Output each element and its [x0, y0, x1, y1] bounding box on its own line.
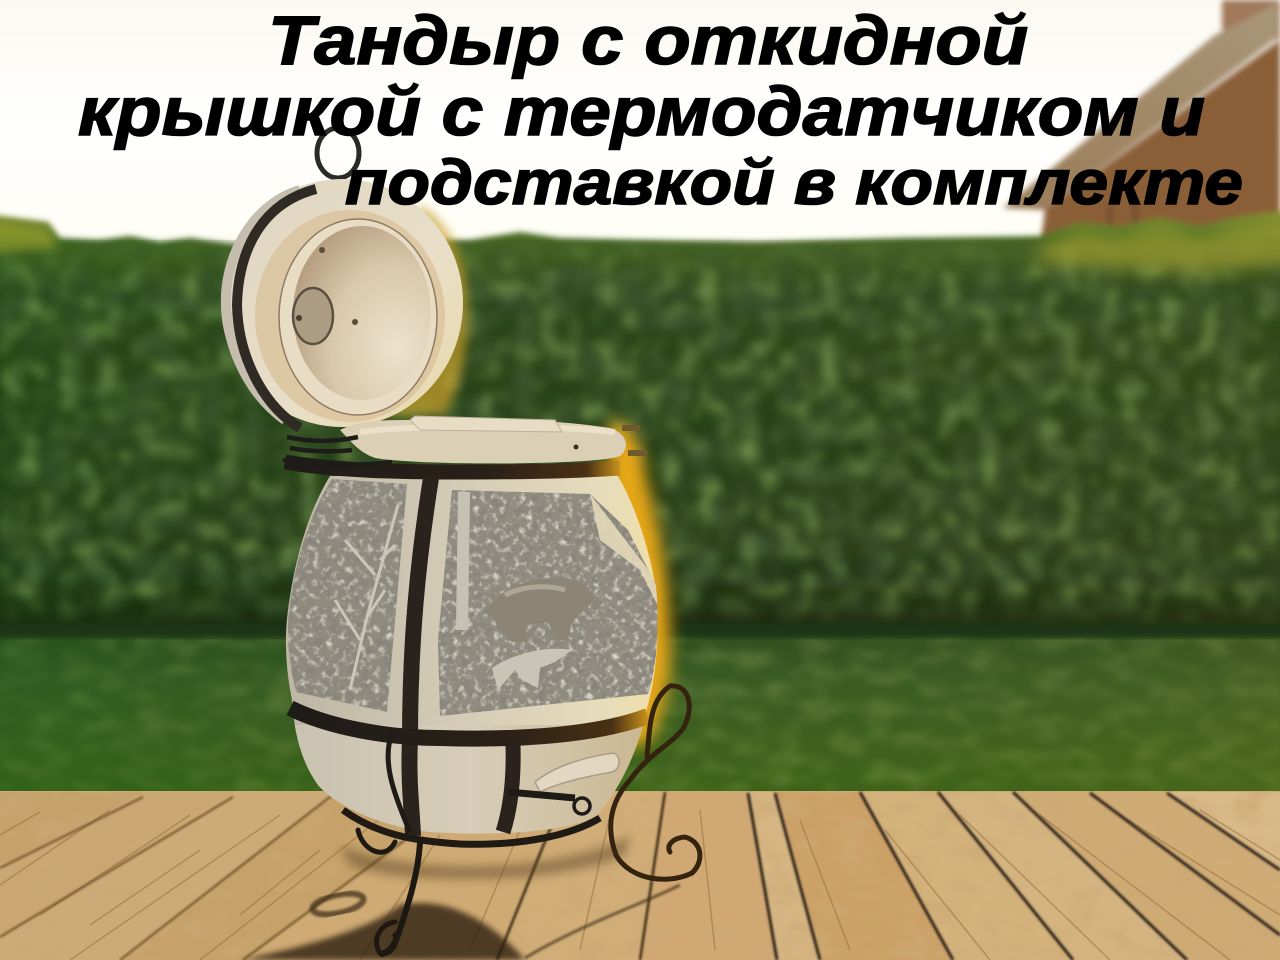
title: крышкой с термодатчиком и: [78, 73, 1205, 150]
background: house: [1003, 0, 1280, 250]
background: lawn: [0, 632, 1280, 792]
lower cream section: [294, 725, 642, 834]
tree trunk: [456, 492, 470, 630]
bear: [488, 577, 594, 642]
second vertical band: [503, 745, 513, 832]
lid ring handle: [317, 128, 359, 178]
top neck: [340, 416, 626, 463]
title: подставкой в комплекте: [345, 148, 1243, 218]
title: Тандыр с откидной: [268, 2, 1028, 79]
dog: [492, 649, 572, 690]
plank seams: [0, 792, 1280, 960]
wood grain streaks: [0, 810, 1280, 960]
lower horizontal band: [290, 708, 648, 739]
pot body: [284, 476, 661, 840]
sunlit hedge tops: [1040, 216, 1280, 272]
stand ring: [343, 810, 600, 844]
plank tones: [0, 792, 143, 868]
relief panel: left forest: [288, 479, 407, 712]
hedge foot shadow: [0, 624, 1280, 638]
curved strap: [388, 733, 410, 832]
main vertical band: [409, 478, 431, 836]
relief panel: right bear scene: [436, 488, 661, 718]
title: [78, 2, 1243, 218]
background: sky: [0, 0, 1280, 260]
hinge rods: [283, 437, 392, 465]
background: hedge: [0, 208, 1280, 640]
door latch: [508, 792, 590, 814]
stand legs: [358, 686, 700, 954]
background: wooden deck: [0, 791, 1280, 960]
open lid: [221, 179, 463, 428]
warm glow along the right edge: [380, 205, 670, 745]
tandoor: [221, 128, 700, 954]
tandoor ground shadows: [240, 835, 680, 960]
wood blotches: [0, 791, 1280, 960]
right handle pins: [622, 428, 647, 453]
top band: [285, 462, 620, 472]
ash door: [535, 753, 619, 792]
